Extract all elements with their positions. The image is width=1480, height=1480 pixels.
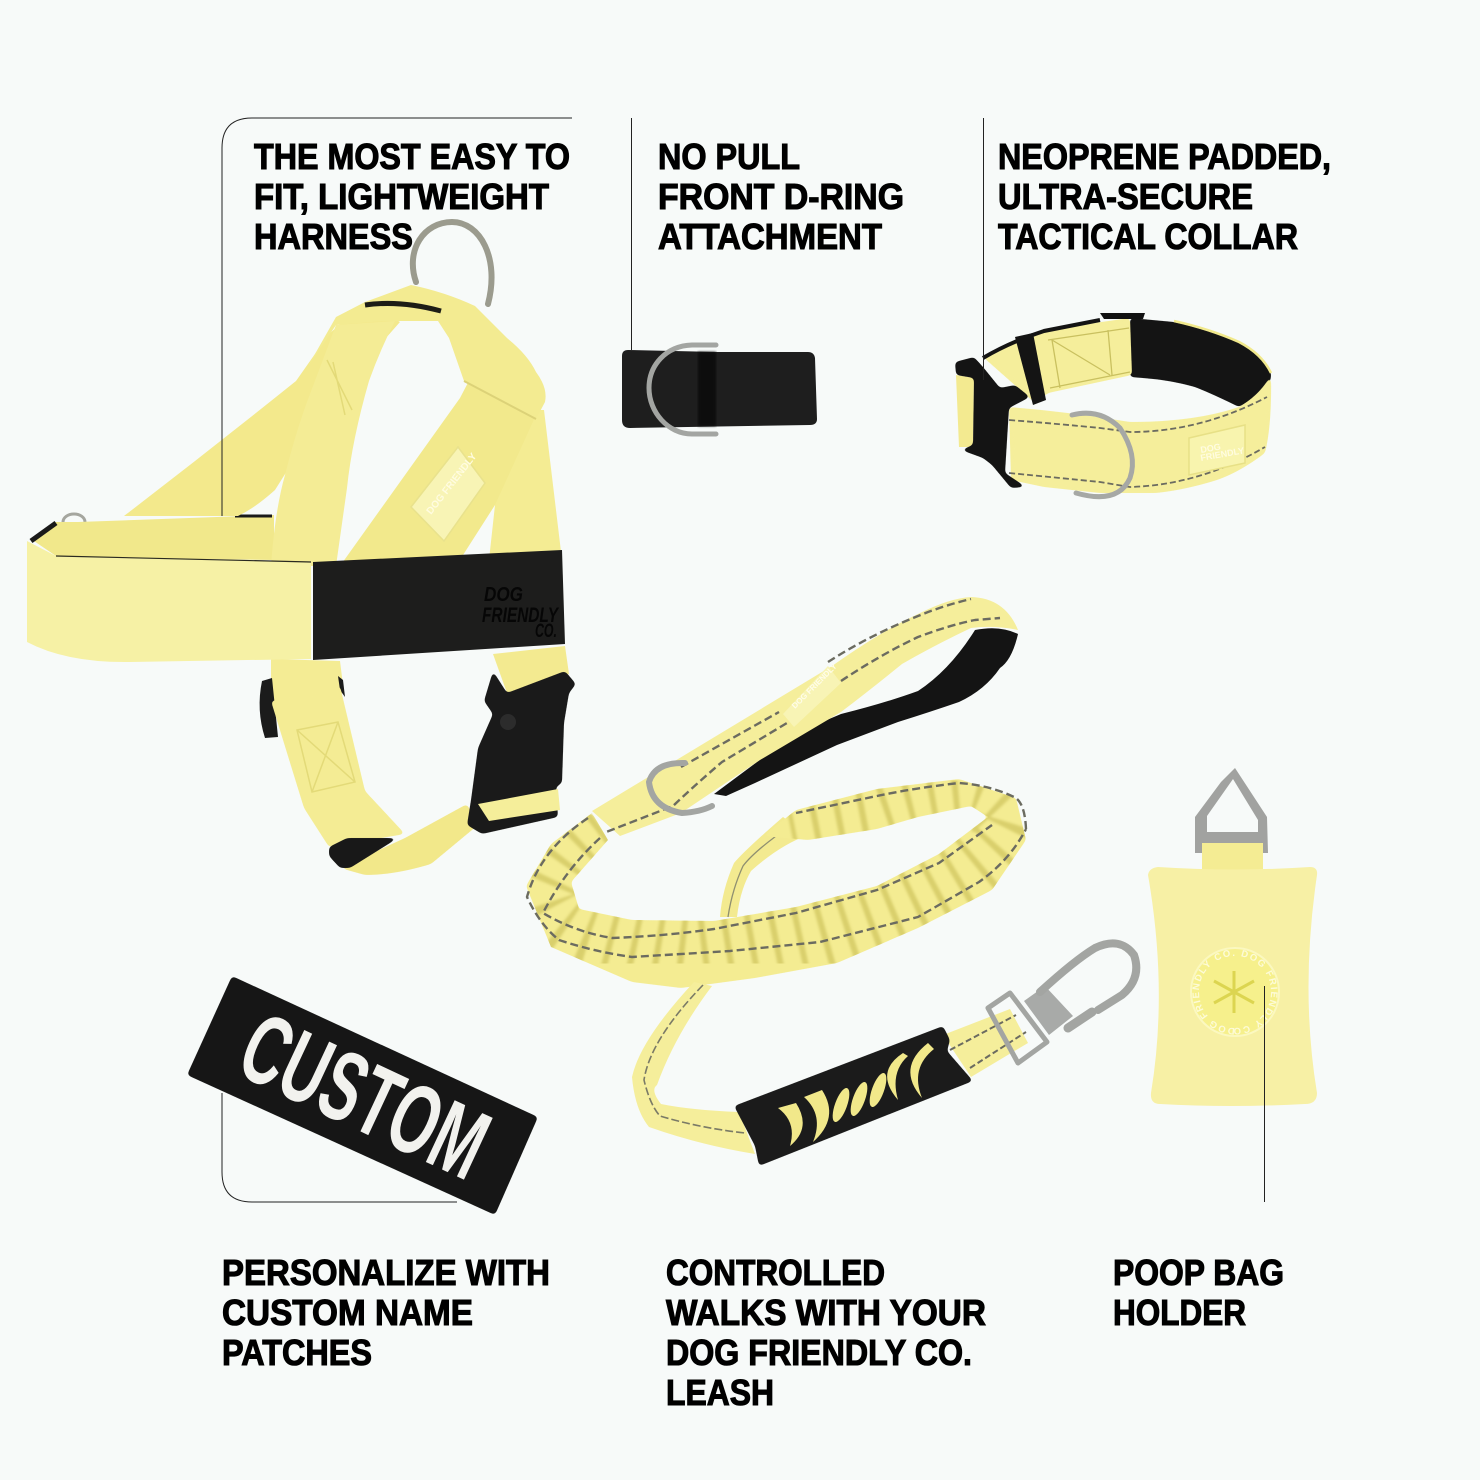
leader line: collar <box>982 118 984 380</box>
heading: personalize: PATCHES <box>222 1332 372 1373</box>
collar badge: DOG <box>1200 442 1222 455</box>
round badge <box>1191 948 1279 1036</box>
heading: controlled walks: DOG FRIENDLY CO. <box>666 1332 972 1373</box>
buckle <box>467 671 576 834</box>
heading: harness <box>254 136 570 257</box>
heading: personalize: PERSONALIZE WITH <box>222 1252 550 1293</box>
black leather panel <box>313 550 565 660</box>
snap hook loop <box>1040 943 1136 1010</box>
harness <box>27 222 576 875</box>
panel logo: DOG <box>484 584 523 606</box>
loop strap <box>1202 843 1263 870</box>
inner neoprene <box>1130 318 1271 407</box>
buckle <box>955 357 1030 488</box>
heading: harness: THE MOST EASY TO <box>254 136 570 177</box>
strap from bungee to lower leash <box>720 817 808 917</box>
grip cut-outs <box>778 1043 934 1146</box>
lower left strap upper <box>271 659 344 703</box>
heading: collar <box>998 136 1331 257</box>
lower strap <box>632 982 755 1154</box>
heading: poop bag: POOP BAG <box>1113 1252 1284 1293</box>
heading: controlled walks: CONTROLLED <box>666 1252 885 1293</box>
heading: poop bag: HOLDER <box>1113 1292 1246 1333</box>
patch text: CUSTOM <box>224 992 505 1201</box>
leash <box>526 597 1136 1166</box>
heading: personalize <box>222 1252 550 1373</box>
upper right strap <box>493 646 569 693</box>
back strap inner <box>31 515 274 560</box>
left long strap <box>124 302 400 516</box>
custom name patch <box>187 976 538 1215</box>
leader line: patch <box>222 1093 457 1202</box>
leader line: harness <box>222 118 572 516</box>
top yoke <box>307 285 546 419</box>
metal ring <box>649 345 716 434</box>
harness small badge <box>411 447 485 541</box>
heading: no pull: FRONT D-RING <box>658 176 904 217</box>
heading: no pull: ATTACHMENT <box>658 216 882 257</box>
wide front band <box>27 541 311 662</box>
lower left tab <box>271 686 405 847</box>
leader line: poop bag holder <box>1264 986 1266 1202</box>
harness small badge: DOG FRIENDLY <box>425 451 480 517</box>
collar ring <box>1072 413 1132 497</box>
carabiner <box>1195 768 1268 853</box>
badge ring text: DOG FRIENDLY CO. DOG FRIENDLY CO. <box>1192 950 1278 1035</box>
patch body <box>187 976 538 1215</box>
heading: collar: NEOPRENE PADDED, <box>998 136 1331 177</box>
star glyph <box>1214 971 1254 1013</box>
top clip <box>1100 313 1145 319</box>
handle badge <box>783 666 841 727</box>
panel logo <box>482 584 559 642</box>
heading: personalize: CUSTOM NAME <box>222 1292 473 1333</box>
black grip <box>734 1026 973 1166</box>
harness d-ring <box>413 222 492 304</box>
heading: controlled walks <box>666 1252 986 1413</box>
panel logo: FRIENDLY <box>482 604 559 627</box>
collar stitching <box>1009 397 1267 487</box>
collar badge: FRIENDLY <box>1200 445 1245 463</box>
front d-ring attachment <box>622 345 817 434</box>
metal snap hook <box>988 943 1136 1063</box>
front band <box>1009 375 1271 493</box>
snap frame <box>988 993 1047 1063</box>
black end tab <box>329 838 398 868</box>
bottom strap <box>340 804 478 875</box>
poop bag holder <box>1148 768 1318 1106</box>
back d-ring <box>63 514 85 530</box>
collar badge <box>1189 425 1245 475</box>
heading: no pull <box>658 136 904 257</box>
right diagonal strap <box>340 375 536 566</box>
bungee section <box>526 779 1026 988</box>
bungee body <box>526 779 1026 988</box>
back keeper <box>1015 333 1046 405</box>
heading: poop bag <box>1113 1252 1284 1333</box>
handle stitching <box>596 599 1000 836</box>
heading: controlled walks: LEASH <box>666 1372 774 1413</box>
loop ring <box>649 763 712 813</box>
left end tab <box>956 375 974 447</box>
snap swivel <box>1024 986 1073 1035</box>
heading: collar: TACTICAL COLLAR <box>998 216 1298 257</box>
heading: collar: ULTRA-SECURE <box>998 176 1253 217</box>
bungee ribs <box>548 789 1008 955</box>
pouch <box>1148 867 1317 1106</box>
left slider <box>260 676 345 738</box>
heading: harness: HARNESS <box>254 216 413 257</box>
bungee stitching <box>527 783 1026 957</box>
webbing fold <box>698 352 716 426</box>
panel logo: CO. <box>535 621 557 642</box>
handle black neoprene <box>714 628 1018 796</box>
black webbing <box>622 350 817 428</box>
heading: controlled walks: WALKS WITH YOUR <box>666 1292 986 1333</box>
tactical collar <box>955 313 1271 497</box>
handle yellow strap <box>592 597 1018 836</box>
back band <box>983 318 1132 403</box>
left front strap <box>271 321 395 566</box>
right vertical strap <box>489 410 562 560</box>
leash badge text: DOG FRIENDLY <box>790 661 839 710</box>
snap gate <box>1068 1012 1092 1028</box>
heading: no pull: NO PULL <box>658 136 800 177</box>
buckle strap tab <box>478 789 560 821</box>
heading: harness: FIT, LIGHTWEIGHT <box>254 176 549 217</box>
leader line: d-ring <box>630 118 632 350</box>
strap after grip <box>943 1009 1028 1077</box>
